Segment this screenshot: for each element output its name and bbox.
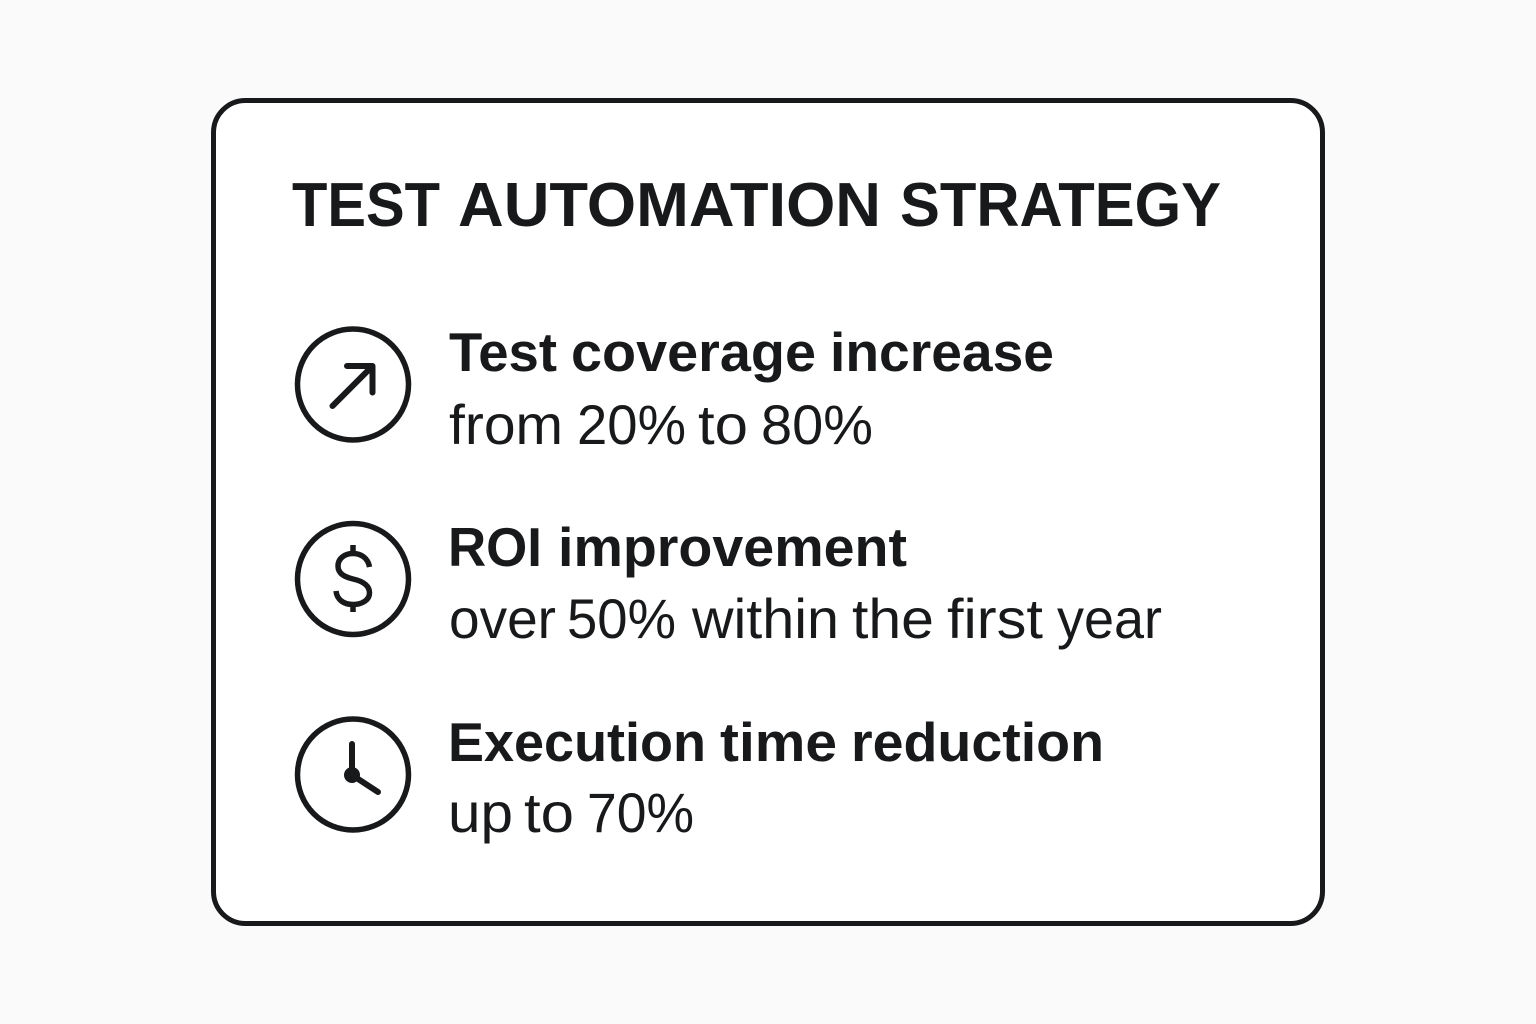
title: STRATEGY <box>900 171 1221 240</box>
heading: test coverage increase: increase <box>830 321 1054 383</box>
text: from 20% to 80% <box>449 393 873 456</box>
text: over 50% within the first year: year <box>1057 587 1162 650</box>
text: over 50% within the first year: first <box>947 587 1043 650</box>
heading: test coverage increase <box>449 321 1054 383</box>
icon: clock in circle <box>298 719 408 830</box>
title: TEST <box>292 171 440 240</box>
heading: execution time reduction: time <box>720 711 837 773</box>
text: over 50% within the first year: the <box>852 587 934 650</box>
title <box>292 171 1221 240</box>
item: ROI <box>298 516 1162 650</box>
heading: ROI improvement: improvement <box>558 516 907 578</box>
text: over 50% within the first year <box>449 587 1162 650</box>
panel: strategy card <box>214 100 1322 924</box>
heading: test coverage increase: Test <box>449 321 557 383</box>
heading: test coverage increase: coverage <box>571 321 816 383</box>
text: from 20% to 80%: 20% <box>577 393 686 456</box>
icon: arrow up-right in circle <box>298 329 408 440</box>
title: AUTOMATION <box>458 171 881 240</box>
text: up to 70%: 70% <box>587 781 694 844</box>
text: over 50% within the first year: within <box>691 587 839 650</box>
text: from 20% to 80%: 80% <box>761 393 873 456</box>
text: up to 70%: to <box>524 781 574 844</box>
heading: execution time reduction: Execution <box>448 711 706 773</box>
item: execution time <box>298 711 1104 844</box>
text: from 20% to 80%: to <box>698 393 748 456</box>
text: over 50% within the first year: 50% <box>567 587 676 650</box>
text: up to 70% <box>448 781 694 844</box>
icon: dollar in circle <box>298 524 408 634</box>
heading: execution time reduction: reduction <box>851 711 1104 773</box>
item: test coverage <box>298 321 1054 456</box>
text: over 50% within the first year: over <box>449 587 556 650</box>
heading: ROI improvement: ROI <box>448 516 542 578</box>
text: from 20% to 80%: from <box>449 393 563 456</box>
heading: execution time reduction <box>448 711 1104 773</box>
text: up to 70%: up <box>448 781 513 844</box>
